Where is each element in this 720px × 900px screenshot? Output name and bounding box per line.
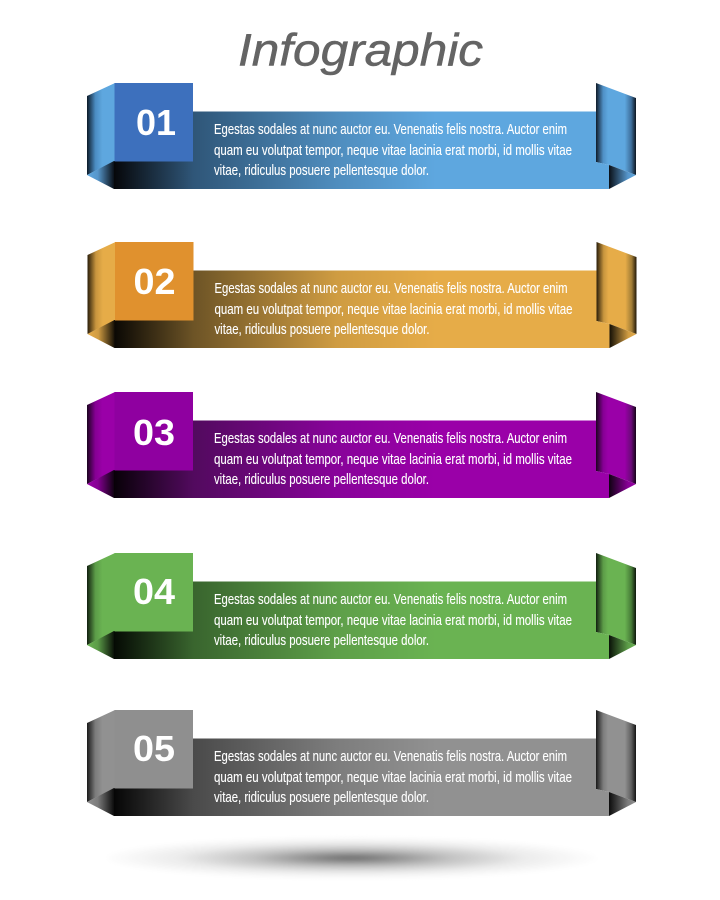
text block: vitae, ridiculus posuere pellentesque dolor.	[214, 633, 429, 649]
title: Infographic	[238, 24, 483, 76]
text block: Egestas sodales at nunc auctor eu. Venenatis felis nostra. Auctor enim	[214, 431, 567, 447]
number box	[114, 392, 193, 470]
text block: vitae, ridiculus posuere pellentesque dolor.	[214, 472, 429, 488]
text block: Egestas sodales at nunc auctor eu. Venenatis felis nostra. Auctor enim	[214, 592, 567, 608]
number box	[114, 553, 193, 632]
ribbon band	[114, 420, 609, 498]
number box: 04	[133, 571, 175, 612]
text block: quam eu volutpat tempor, neque vitae lacinia erat morbi, id mollis vitae	[214, 452, 572, 468]
right fold	[596, 553, 636, 659]
text block: Egestas sodales at nunc auctor eu. Venenatis felis nostra. Auctor enim	[214, 749, 567, 765]
text block: Egestas sodales at nunc auctor eu. Venenatis felis nostra. Auctor enim	[214, 122, 567, 138]
left fold	[87, 710, 115, 816]
panel: ribbon 03	[87, 392, 636, 498]
text block	[214, 431, 572, 488]
panel: ribbon 04	[87, 553, 636, 659]
text block: vitae, ridiculus posuere pellentesque dolor.	[214, 322, 430, 338]
right fold	[596, 392, 636, 498]
text block: quam eu volutpat tempor, neque vitae lacinia erat morbi, id mollis vitae	[214, 770, 572, 786]
left fold	[87, 392, 115, 498]
number box: 01	[136, 102, 176, 143]
number box: 02	[134, 261, 176, 302]
ribbon band	[114, 270, 610, 348]
panel: ribbon 05	[87, 710, 636, 816]
text block: quam eu volutpat tempor, neque vitae lacinia erat morbi, id mollis vitae	[214, 143, 572, 159]
number box	[115, 242, 194, 320]
text block: vitae, ridiculus posuere pellentesque dolor.	[214, 163, 429, 179]
panel: ribbon 02	[88, 242, 636, 348]
text block: Egestas sodales at nunc auctor eu. Venenatis felis nostra. Auctor enim	[214, 281, 568, 297]
left fold	[87, 553, 115, 659]
right fold	[596, 710, 636, 816]
ribbon band	[114, 582, 609, 659]
text block: vitae, ridiculus posuere pellentesque dolor.	[214, 790, 429, 806]
ground shadow	[106, 837, 606, 879]
number box	[114, 710, 193, 788]
text block	[214, 749, 572, 806]
text block: quam eu volutpat tempor, neque vitae lacinia erat morbi, id mollis vitae	[214, 302, 572, 318]
text block	[214, 281, 572, 338]
right fold	[596, 242, 636, 348]
ribbon band	[114, 112, 609, 189]
text block	[214, 122, 572, 179]
ribbon band	[114, 738, 609, 816]
text block	[214, 592, 572, 649]
right fold	[596, 83, 636, 189]
number box: 05	[133, 728, 175, 769]
number box	[114, 83, 193, 162]
number box: 03	[133, 412, 175, 453]
left fold	[88, 242, 116, 348]
text block: quam eu volutpat tempor, neque vitae lacinia erat morbi, id mollis vitae	[214, 613, 572, 629]
panel: ribbon 01	[87, 83, 636, 189]
left fold	[87, 83, 115, 189]
